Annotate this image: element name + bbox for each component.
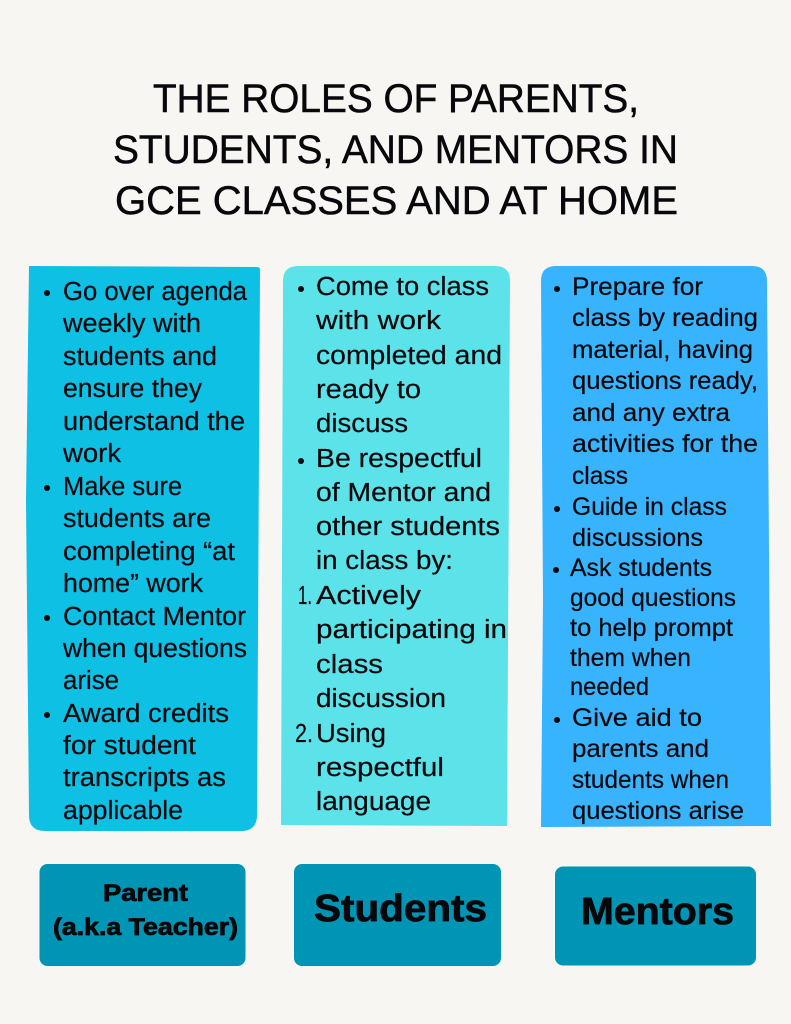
student roles list: in class by: [316,547,453,575]
parent roles list: work [62,440,121,468]
student roles list: Using [316,720,386,748]
mentor roles list: class by reading [572,304,758,332]
parent roles list: for student [63,732,196,760]
label box: parent: Parent [103,880,188,907]
parent roles list: students are [63,505,211,533]
student roles list: language [316,788,431,816]
panel: parent roles [26,266,260,831]
parent roles list: Contact Mentor [63,603,247,631]
parent roles list: Make sure [63,473,182,501]
parent roles list: applicable [63,797,183,825]
parent roles list: Go over agenda [63,278,248,306]
mentor roles list: needed [570,673,649,701]
parent roles list: home” work [63,570,203,598]
student roles list: discussion [316,685,446,713]
mentor roles list: Prepare for [572,273,703,301]
parent roles list: Award credits [63,700,229,728]
mentor roles list: questions arise [572,797,744,825]
label box: parent [40,864,246,966]
student roles list: discuss [316,410,408,438]
parent roles list [44,278,248,825]
mentor roles list: good questions [570,584,736,612]
mentor roles list: to help prompt [570,614,733,642]
student roles list: class [316,651,383,679]
mentor roles list: questions ready, [572,367,758,395]
panel: student roles [281,266,510,826]
parent roles list: understand the [63,408,245,436]
mentor roles list: Ask students [570,554,712,582]
mentor roles list: students when [572,766,729,794]
student roles list: completed and [316,342,502,370]
label box: students [294,864,501,966]
parent roles list: when questions [62,635,247,663]
student roles list: ready to [316,376,421,404]
mentor roles list: material, having [572,336,753,364]
student roles list: Actively [316,582,421,610]
student roles list: with work [315,307,441,335]
parent roles list: arise [63,667,119,695]
student roles list: Come to class [316,273,489,301]
mentor roles list: discussions [572,524,703,552]
student roles list [295,273,507,816]
mentor roles list: parents and [572,735,709,763]
title: GCE CLASSES AND AT HOME [115,179,678,223]
student roles list: of Mentor and [316,479,491,507]
label box: mentors [555,866,756,966]
mentor roles list: and any extra [572,399,730,427]
parent roles list: weekly with [62,310,201,338]
panel: mentor roles [541,266,771,827]
title: THE ROLES OF PARENTS, [153,77,639,121]
parent roles list: students and [63,343,217,371]
mentor roles list: class [572,462,628,490]
label box: students: Students [314,888,487,930]
student roles list: 1. [298,582,312,610]
label box: mentors: Mentors [581,891,734,933]
label box: parent: (a.k.a Teacher) [53,914,238,941]
title: STUDENTS, AND MENTORS IN [113,128,678,172]
parent roles list: completing “at [63,538,235,566]
mentor roles list: Guide in class [572,493,727,521]
student roles list: other students [316,513,500,541]
mentor roles list: activities for the [572,430,758,458]
student roles list: respectful [316,754,444,782]
mentor roles list: Give aid to [572,704,702,732]
mentor roles list: them when [570,644,691,672]
title [113,77,678,223]
student roles list: participating in [316,616,507,644]
student roles list: 2. [295,720,313,748]
parent roles list: transcripts as [63,764,226,792]
student roles list: Be respectful [316,445,482,473]
mentor roles list [553,273,758,825]
parent roles list: ensure they [63,375,202,403]
